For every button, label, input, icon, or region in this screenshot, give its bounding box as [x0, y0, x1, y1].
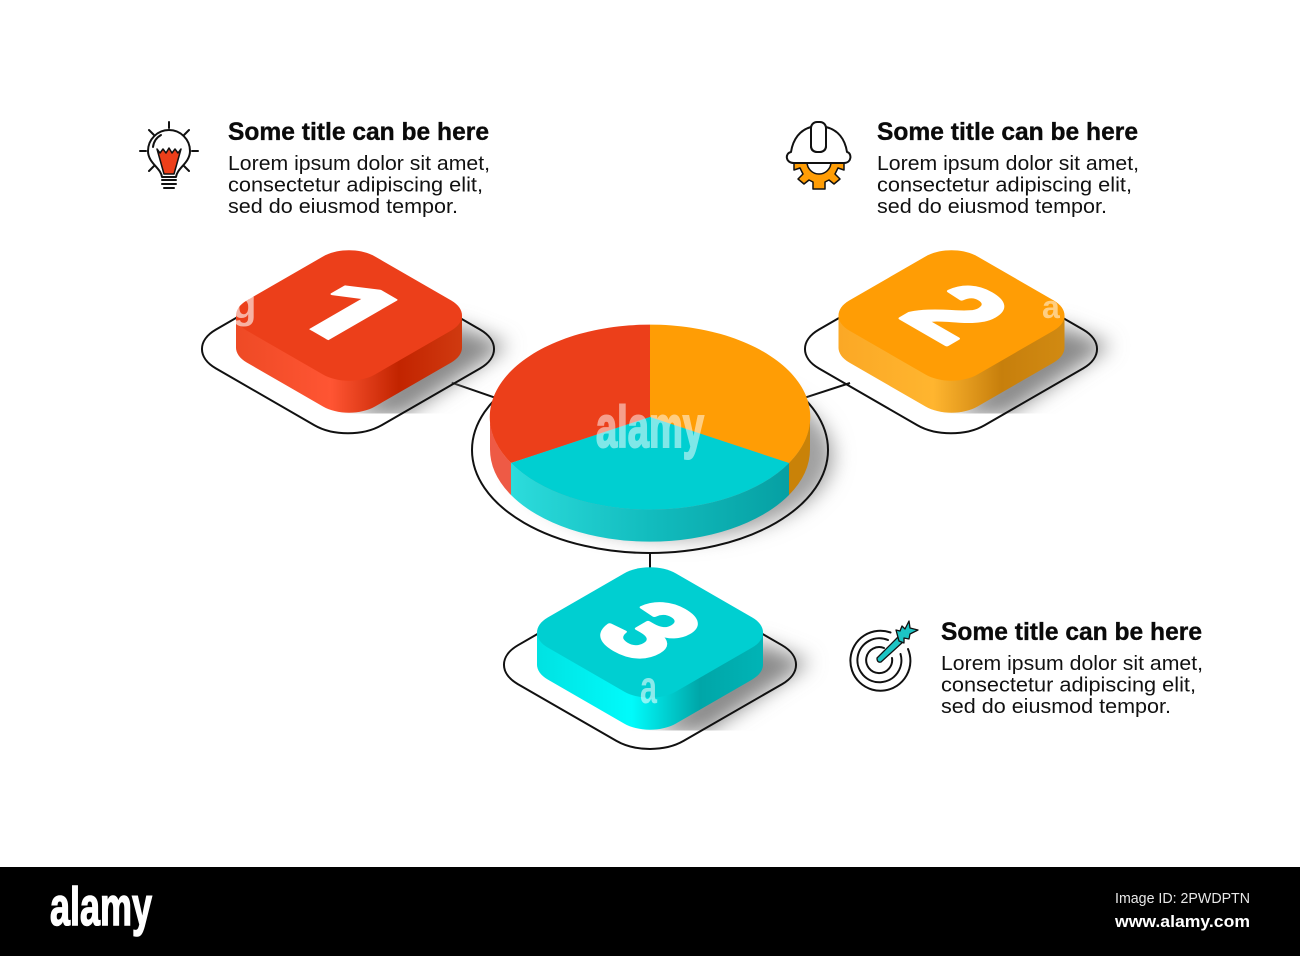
number 3: 3	[569, 583, 731, 677]
pie base ring	[472, 347, 828, 553]
watermark fragment: a	[640, 661, 657, 713]
block 1 shadow	[349, 325, 508, 416]
step 3 block	[504, 567, 810, 749]
image id: Image ID: 2PWDPTN	[1115, 890, 1250, 907]
step 2 block	[805, 250, 1111, 433]
connector: block 3 to pie	[649, 553, 651, 568]
block 2 top	[838, 250, 1065, 381]
text block 2	[877, 118, 1139, 218]
central pie chart	[472, 325, 833, 553]
text block 1	[228, 118, 490, 218]
block 1 outline	[202, 265, 494, 433]
step 1 block	[202, 250, 508, 433]
block 3 shadow	[651, 642, 810, 733]
block 3 outline	[504, 580, 796, 749]
block 3 top	[537, 567, 763, 698]
body 2: consectetur adipiscing elit,	[877, 174, 1132, 196]
body 3	[941, 652, 1203, 718]
icon: helmet with gear	[787, 122, 850, 189]
red slice	[490, 325, 650, 463]
number 2: 2	[877, 267, 1036, 359]
body 2: sed do eiusmod tempor.	[877, 195, 1107, 218]
watermark fragment: a	[1042, 289, 1060, 325]
block 2 outline	[805, 265, 1097, 433]
body 2	[877, 152, 1139, 218]
pie front wall	[511, 463, 789, 542]
block 2 side	[838, 282, 1065, 413]
teal slice	[511, 417, 789, 510]
connector: block 1 to pie	[452, 383, 494, 397]
watermark fragment: g	[232, 283, 256, 327]
title 3: Some title can be here	[941, 618, 1202, 646]
watermark: alamy	[596, 395, 704, 460]
number 1: 1	[241, 259, 445, 376]
icon: light bulb	[140, 122, 198, 188]
block 1 side	[236, 282, 462, 413]
body 3: sed do eiusmod tempor.	[941, 695, 1171, 718]
body 3: consectetur adipiscing elit,	[941, 674, 1196, 696]
block 1 top	[236, 250, 462, 381]
pie left wall	[490, 417, 511, 495]
body 1: Lorem ipsum dolor sit amet,	[228, 152, 490, 175]
footer band	[0, 867, 1300, 956]
block 2 shadow	[952, 325, 1111, 416]
pie right wall	[789, 417, 810, 495]
orange slice	[650, 325, 810, 463]
body 1: sed do eiusmod tempor.	[228, 195, 458, 218]
website: www.alamy.com	[1114, 912, 1250, 931]
body 1: consectetur adipiscing elit,	[228, 174, 483, 196]
body 2: Lorem ipsum dolor sit amet,	[877, 152, 1139, 175]
connector: block 2 to pie	[806, 383, 850, 397]
title 1: Some title can be here	[228, 118, 489, 146]
text block 3	[941, 618, 1203, 718]
body 1	[228, 152, 490, 218]
title 2: Some title can be here	[877, 118, 1138, 146]
block 3 side	[537, 599, 763, 730]
body 3: Lorem ipsum dolor sit amet,	[941, 652, 1203, 675]
footer logo: alamy	[50, 877, 152, 937]
icon: target with arrow	[850, 621, 918, 691]
pie shadow	[517, 374, 833, 538]
